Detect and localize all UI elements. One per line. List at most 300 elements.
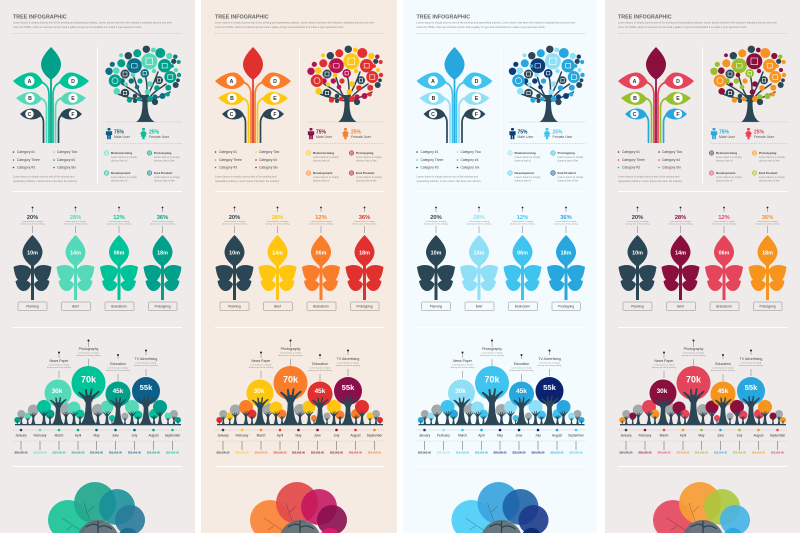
leaf plant chart: Brief bbox=[677, 304, 684, 308]
feature list bbox=[306, 151, 383, 182]
bubble forest chart: Lorem Ipsum is simply bbox=[683, 352, 705, 354]
female user stat: 25% bbox=[754, 130, 765, 136]
leaf tree diagram: D bbox=[71, 79, 75, 85]
feature list: dummy text of the bbox=[356, 158, 377, 162]
monthly timeline: $55,000.00 bbox=[494, 450, 507, 454]
category legend: Category #1 bbox=[420, 150, 439, 154]
feature list: dummy text of bbox=[313, 178, 330, 182]
monthly timeline: $55,000.00 bbox=[368, 450, 382, 454]
feature list: End Product bbox=[154, 171, 172, 175]
bubble forest chart: News Paper bbox=[251, 359, 271, 363]
leaf plant chart: 14m bbox=[474, 250, 485, 256]
feature list: dummy text of the bbox=[154, 158, 175, 162]
monthly timeline: $55,000.00 bbox=[147, 450, 161, 454]
leaf plant chart: dummy text of the printing bbox=[151, 222, 175, 226]
male user stat bbox=[316, 130, 333, 139]
icon: female user bbox=[543, 128, 551, 139]
monthly timeline: $55,000.00 bbox=[437, 450, 451, 454]
intro text bbox=[618, 20, 777, 29]
bubble forest chart: 30k bbox=[254, 388, 265, 395]
monthly timeline: January bbox=[419, 434, 431, 438]
monthly timeline: May bbox=[93, 434, 100, 438]
bubble forest chart: 70k bbox=[686, 374, 702, 384]
monthly timeline: May bbox=[497, 434, 503, 438]
bubble forest chart: Lorem Ipsum is simply bbox=[482, 352, 503, 354]
monthly timeline: March bbox=[660, 434, 669, 438]
leaf tree diagram bbox=[416, 47, 492, 143]
leaf tree diagram: F bbox=[676, 112, 680, 118]
category legend: Category #3 bbox=[622, 166, 640, 170]
bubble forest chart: Lorem Ipsum is simply bbox=[108, 366, 129, 370]
category legend: Category Three bbox=[219, 158, 242, 162]
leaf plant chart: Lorem Ipsum is simply bbox=[627, 220, 649, 223]
legend note: Lorem Ipsum is simply dummy text of the printing and bbox=[13, 174, 75, 178]
monthly timeline: $55,000.00 bbox=[274, 450, 287, 454]
intro text: since the 1500s, when an unknown printer took a galley of type and scrambled it to make a type specimen book. bbox=[416, 25, 546, 29]
bubble forest chart: Lorem Ipsum is simply bbox=[338, 362, 359, 364]
intro text: since the 1500s, when an unknown printer took a galley of type and scrambled it to make a type specimen book. bbox=[215, 25, 344, 29]
leaf tree diagram: C bbox=[633, 112, 637, 118]
monthly timeline: January bbox=[217, 434, 229, 438]
monthly timeline: June bbox=[516, 434, 523, 438]
monthly timeline: March bbox=[458, 434, 467, 438]
category legend: Category Six bbox=[662, 166, 681, 170]
bubble forest chart: 45k bbox=[516, 388, 527, 395]
feature list bbox=[508, 151, 584, 182]
female user stat bbox=[754, 130, 775, 139]
bubble forest chart: Education bbox=[514, 362, 529, 366]
feature list: Lorem Ipsum is simply bbox=[313, 175, 340, 179]
female user stat bbox=[552, 130, 573, 139]
leaf plant chart: Prototyping bbox=[759, 304, 776, 308]
monthly timeline: August bbox=[754, 434, 764, 438]
bubble forest chart: 30k bbox=[455, 388, 466, 395]
leaf plant chart: Prototyping bbox=[356, 304, 373, 308]
bubble forest chart: Photography bbox=[482, 347, 502, 351]
category legend: Category #3 bbox=[420, 166, 439, 170]
leaf plant chart: 10m bbox=[229, 250, 240, 256]
monthly timeline: $55,000.00 bbox=[570, 450, 583, 454]
category legend: Category Two bbox=[460, 150, 481, 154]
monthly timeline: April bbox=[75, 434, 81, 438]
male user stat: Male User bbox=[518, 135, 534, 139]
overlapping canopy tree bbox=[653, 482, 750, 533]
monthly timeline: $55,000.00 bbox=[695, 450, 709, 454]
leaf plant chart: 06m bbox=[316, 250, 327, 256]
feature list: Lorem Ipsum is simply bbox=[111, 175, 138, 179]
monthly timeline: May bbox=[698, 434, 705, 438]
bubble forest chart: Lorem Ipsum is simply bbox=[539, 362, 561, 364]
leaf tree diagram: A bbox=[431, 79, 435, 85]
monthly timeline: April bbox=[680, 434, 686, 438]
monthly timeline: $55,000.00 bbox=[733, 450, 747, 454]
female user stat: Female User bbox=[754, 135, 775, 139]
category legend: Category Two bbox=[259, 150, 279, 154]
feature list: dummy text of bbox=[716, 178, 733, 182]
legend note: Lorem Ipsum is simply dummy text of the printing and bbox=[416, 174, 478, 178]
bubble forest chart: 55k bbox=[342, 383, 355, 392]
leaf plant chart: Lorem Ipsum is simply bbox=[354, 220, 376, 223]
feature list: End Product bbox=[558, 171, 576, 175]
feature list: Lorem Ipsum is simply bbox=[558, 175, 584, 179]
leaf plant chart: Lorem Ipsum is simply bbox=[224, 220, 246, 223]
leaf plant chart: 36% bbox=[359, 215, 370, 221]
bubble forest chart: dummy text of the printing bbox=[538, 364, 562, 367]
bubble forest chart: dummy text of the printing bbox=[652, 366, 677, 369]
monthly timeline: $55,000.00 bbox=[53, 450, 66, 454]
leaf plant chart: 10m bbox=[27, 250, 38, 256]
bubble forest chart: Lorem Ipsum is simply bbox=[741, 362, 762, 364]
leaf plant chart: dummy text of the printing bbox=[669, 222, 693, 226]
legend note: Lorem Ipsum is simply dummy text of the printing and bbox=[215, 174, 277, 178]
monthly timeline: September bbox=[568, 434, 585, 438]
leaf plant chart bbox=[14, 207, 182, 311]
leaf plant chart: Lorem Ipsum is simply bbox=[714, 220, 735, 223]
monthly timeline: $55,000.00 bbox=[109, 450, 123, 454]
bubble forest chart bbox=[216, 340, 383, 425]
monthly timeline: February bbox=[34, 434, 47, 438]
legend note bbox=[416, 174, 481, 183]
monthly timeline: $55,000.00 bbox=[639, 450, 652, 454]
leaf plant chart bbox=[618, 207, 786, 311]
bubble forest chart: TV Advertising bbox=[337, 357, 359, 361]
monthly timeline: March bbox=[55, 434, 64, 438]
category legend: Category #4 bbox=[57, 158, 75, 162]
category legend: Category Three bbox=[622, 158, 645, 162]
icon: male user bbox=[308, 128, 314, 139]
bubble forest chart: News Paper bbox=[49, 359, 69, 363]
bubble forest chart: dummy text of the printing bbox=[249, 366, 274, 369]
bubble forest chart: Photography bbox=[684, 347, 704, 351]
leaf plant chart: Lorem Ipsum is simply bbox=[267, 220, 289, 223]
leaf plant chart: 36% bbox=[157, 215, 168, 221]
feature list: Lorem Ipsum is simply bbox=[716, 175, 743, 179]
monthly timeline bbox=[416, 429, 586, 454]
bubble forest chart: Lorem Ipsum is simply bbox=[49, 364, 70, 366]
feature list: Lorem Ipsum is simply bbox=[111, 155, 138, 159]
leaf plant chart: Planning bbox=[430, 304, 442, 308]
feature list: Prototyping bbox=[759, 151, 776, 155]
male user stat bbox=[114, 130, 131, 139]
feature list: Development bbox=[313, 171, 332, 175]
feature list bbox=[104, 151, 181, 182]
leaf plant chart: 18m bbox=[157, 250, 168, 256]
feature list: Lorem Ipsum is simply bbox=[759, 155, 786, 159]
category legend bbox=[618, 150, 682, 170]
feature list: dummy text of bbox=[111, 178, 128, 182]
feature list: End Product bbox=[759, 171, 777, 175]
feature list: Lorem Ipsum is simply bbox=[514, 155, 541, 159]
leaf tree diagram bbox=[215, 47, 291, 143]
male user stat: Male User bbox=[719, 135, 736, 139]
leaf tree diagram: A bbox=[230, 79, 234, 85]
icon: female user bbox=[745, 128, 752, 139]
category legend: Category Six bbox=[460, 166, 480, 170]
bubble forest chart: Lorem Ipsum is simply bbox=[136, 362, 157, 364]
leaf plant chart: Planning bbox=[26, 304, 39, 308]
bubble forest chart: dummy text of the printing bbox=[510, 369, 534, 372]
bubble forest chart: dummy text of the printing bbox=[134, 364, 159, 367]
leaf plant chart: dummy text of the printing bbox=[309, 222, 334, 226]
monthly timeline: $55,000.00 bbox=[330, 450, 344, 454]
female user stat bbox=[351, 130, 372, 139]
feature list: Brainstorming bbox=[313, 151, 334, 155]
feature list: Development bbox=[716, 171, 735, 175]
legend note bbox=[618, 174, 683, 183]
heading: TREE INFOGRAPHIC bbox=[215, 14, 269, 20]
leaf plant chart: dummy text of the printing bbox=[712, 222, 737, 226]
monthly timeline: $55,000.00 bbox=[456, 450, 470, 454]
leaf plant chart: 20% bbox=[632, 215, 643, 221]
category legend: Category Six bbox=[259, 166, 278, 170]
leaf plant chart: Lorem Ipsum is simply bbox=[469, 220, 490, 223]
male user stat: 75% bbox=[316, 130, 327, 136]
leaf plant chart: Lorem Ipsum is simply bbox=[670, 220, 692, 223]
leaf plant chart: 12% bbox=[315, 215, 327, 221]
icon: female user bbox=[140, 128, 147, 139]
leaf tree diagram: C bbox=[230, 112, 234, 118]
feature list: dummy text of the bbox=[759, 158, 780, 162]
monthly timeline bbox=[618, 429, 787, 454]
leaf plant chart: dummy text of the printing bbox=[223, 222, 247, 226]
category legend: Category #1 bbox=[622, 150, 640, 154]
heading: TREE INFOGRAPHIC bbox=[416, 14, 470, 20]
leaf plant chart: 10m bbox=[632, 250, 643, 256]
intro text bbox=[13, 20, 172, 29]
monthly timeline: $55,000.00 bbox=[349, 450, 363, 454]
female user stat: Female User bbox=[149, 135, 170, 139]
leaf plant chart: 20% bbox=[27, 215, 38, 221]
monthly timeline: May bbox=[295, 434, 302, 438]
leaf tree diagram: F bbox=[475, 112, 478, 118]
category legend bbox=[13, 150, 77, 170]
category legend: Category Two bbox=[57, 150, 77, 154]
monthly timeline: $55,000.00 bbox=[292, 450, 306, 454]
monthly timeline bbox=[13, 429, 182, 454]
feature list: Lorem Ipsum is simply bbox=[313, 155, 340, 159]
feature list: Development bbox=[514, 171, 534, 175]
leaf plant chart: 12% bbox=[517, 215, 528, 221]
feature list: Development bbox=[111, 171, 130, 175]
category legend: Category #4 bbox=[662, 158, 680, 162]
icon tree bbox=[105, 46, 181, 122]
leaf plant chart: Brief bbox=[476, 304, 482, 308]
leaf plant chart: dummy text of the printing bbox=[626, 222, 650, 226]
monthly timeline: $55,000.00 bbox=[166, 450, 180, 454]
bubble forest chart: dummy text of the printing bbox=[711, 369, 736, 372]
monthly timeline: $55,000.00 bbox=[714, 450, 728, 454]
monthly timeline: $55,000.00 bbox=[677, 450, 690, 454]
leaf plant chart: 28% bbox=[272, 215, 283, 221]
leaf plant chart: dummy text of the printing bbox=[424, 222, 449, 226]
monthly timeline: July bbox=[334, 434, 340, 438]
monthly timeline: September bbox=[770, 434, 786, 438]
legend note: typesetting industry. Lorem Ipsum has been the industry bbox=[215, 179, 280, 183]
leaf plant chart: Prototyping bbox=[154, 304, 171, 308]
category legend: Category #4 bbox=[460, 158, 479, 162]
leaf plant chart: Brainstorm bbox=[515, 304, 531, 308]
leaf plant chart: 12% bbox=[113, 215, 125, 221]
intro text bbox=[215, 20, 374, 29]
bubble forest chart: TV Advertising bbox=[740, 357, 762, 361]
leaf tree diagram: B bbox=[28, 96, 32, 102]
bubble forest chart: dummy text of the printing bbox=[451, 366, 475, 369]
overlapping canopy tree bbox=[250, 482, 347, 533]
bubble forest chart bbox=[619, 340, 786, 425]
leaf plant chart: Lorem Ipsum is simply bbox=[426, 220, 447, 223]
feature list: dummy text of the bbox=[759, 178, 780, 182]
heading: TREE INFOGRAPHIC bbox=[13, 14, 67, 20]
leaf plant chart bbox=[417, 207, 585, 311]
icon: male user bbox=[509, 128, 516, 139]
bubble forest chart: dummy text of the printing bbox=[480, 354, 505, 357]
male user stat bbox=[719, 130, 736, 139]
leaf plant chart: Brainstorm bbox=[313, 304, 329, 308]
bubble forest chart: Lorem Ipsum is simply bbox=[511, 366, 533, 370]
monthly timeline: $55,000.00 bbox=[217, 450, 230, 454]
legend note bbox=[13, 174, 78, 183]
leaf plant chart: Prototyping bbox=[558, 304, 574, 308]
monthly timeline: $55,000.00 bbox=[532, 450, 545, 454]
leaf tree diagram: D bbox=[475, 79, 479, 85]
monthly timeline: June bbox=[314, 434, 321, 438]
leaf plant chart: 10m bbox=[431, 250, 442, 256]
bubble forest chart: dummy text of the printing bbox=[739, 364, 764, 367]
female user stat: 25% bbox=[552, 130, 563, 136]
leaf tree diagram: C bbox=[28, 112, 32, 118]
monthly timeline: June bbox=[112, 434, 119, 438]
legend note: typesetting industry. Lorem Ipsum has been the industry bbox=[618, 179, 683, 183]
category legend: Category Two bbox=[662, 150, 682, 154]
leaf plant chart: Brainstorm bbox=[111, 304, 127, 308]
monthly timeline: $55,000.00 bbox=[15, 450, 28, 454]
category legend: Category #3 bbox=[219, 166, 237, 170]
bubble forest chart: News Paper bbox=[654, 359, 674, 363]
intro text: Lorem Ipsum is simply dummy text of the printing and typesetting industry. Lorem Ipsum has been the industry's standard dummy text ever bbox=[618, 20, 777, 24]
leaf plant chart: 18m bbox=[561, 250, 572, 256]
leaf tree diagram: D bbox=[273, 79, 277, 85]
category legend bbox=[215, 150, 279, 170]
feature list: Prototyping bbox=[356, 151, 373, 155]
leaf plant chart: Planning bbox=[228, 304, 241, 308]
panel: teal variant bbox=[0, 0, 195, 533]
bubble forest chart: dummy text of the printing bbox=[77, 354, 101, 357]
monthly timeline: $55,000.00 bbox=[513, 450, 526, 454]
leaf plant chart: dummy text of the printing bbox=[756, 222, 780, 226]
female user stat: 25% bbox=[351, 130, 362, 136]
feature list: Lorem Ipsum is simply bbox=[716, 155, 743, 159]
bubble forest chart: Education bbox=[312, 362, 328, 366]
monthly timeline: June bbox=[717, 434, 724, 438]
leaf tree diagram: D bbox=[676, 79, 680, 85]
feature list: Prototyping bbox=[154, 151, 171, 155]
bubble forest chart: Photography bbox=[79, 347, 99, 351]
feature list: dummy text of bbox=[313, 158, 330, 162]
feature list: Lorem Ipsum is simply bbox=[356, 155, 383, 159]
monthly timeline: $55,000.00 bbox=[90, 450, 104, 454]
leaf plant chart: dummy text of the printing bbox=[64, 222, 88, 226]
monthly timeline: $55,000.00 bbox=[311, 450, 325, 454]
leaf plant chart: dummy text of the printing bbox=[353, 222, 377, 226]
leaf tree diagram bbox=[13, 47, 89, 143]
leaf plant chart: dummy text of the printing bbox=[266, 222, 290, 226]
monthly timeline: $55,000.00 bbox=[551, 450, 564, 454]
monthly timeline: $55,000.00 bbox=[475, 450, 489, 454]
leaf plant chart: Lorem Ipsum is simply bbox=[109, 220, 130, 223]
bubble forest chart: 55k bbox=[140, 383, 153, 392]
leaf tree diagram: E bbox=[273, 96, 277, 102]
feature list: Lorem Ipsum is simply bbox=[514, 175, 541, 179]
bubble forest chart: Lorem Ipsum is simply bbox=[452, 364, 474, 366]
bubble forest chart: 45k bbox=[113, 388, 124, 395]
panel: blue variant bbox=[403, 0, 597, 533]
bubble forest chart: Lorem Ipsum is simply bbox=[654, 364, 675, 366]
monthly timeline: July bbox=[535, 434, 541, 438]
monthly timeline: July bbox=[132, 434, 138, 438]
category legend: Category Six bbox=[57, 166, 76, 170]
bubble forest chart: Photography bbox=[281, 347, 301, 351]
icon tree bbox=[710, 46, 786, 122]
leaf plant chart: 18m bbox=[762, 250, 773, 256]
monthly timeline: September bbox=[367, 434, 383, 438]
panel: warm variant bbox=[201, 0, 397, 533]
legend note: Lorem Ipsum is simply dummy text of the printing and bbox=[618, 174, 680, 178]
leaf plant chart: Planning bbox=[631, 304, 644, 308]
bubble forest chart: dummy text of the printing bbox=[279, 354, 303, 357]
bubble forest chart: 55k bbox=[543, 383, 557, 392]
bubble forest chart: TV Advertising bbox=[538, 357, 561, 361]
monthly timeline: August bbox=[552, 434, 562, 438]
category legend bbox=[416, 150, 481, 170]
leaf plant chart: dummy text of the printing bbox=[21, 222, 45, 226]
leaf plant chart: Lorem Ipsum is simply bbox=[757, 220, 779, 223]
monthly timeline: $55,000.00 bbox=[752, 450, 766, 454]
feature list: dummy text of the bbox=[558, 158, 579, 162]
female user stat: 25% bbox=[149, 130, 160, 136]
category legend: Category Three bbox=[17, 158, 40, 162]
icon tree bbox=[307, 46, 383, 122]
intro text: Lorem Ipsum is simply dummy text of the printing and typesetting industry. Lorem Ipsum has been the industry's standard dummy text ever bbox=[13, 20, 172, 24]
leaf plant chart: Brief bbox=[274, 304, 281, 308]
icon tree bbox=[509, 46, 585, 122]
monthly timeline: $55,000.00 bbox=[658, 450, 671, 454]
intro text: since the 1500s, when an unknown printer took a galley of type and scrambled it to make a type specimen book. bbox=[618, 25, 747, 29]
feature list: Lorem Ipsum is simply bbox=[356, 175, 383, 179]
leaf plant chart: 14m bbox=[675, 250, 686, 256]
bubble forest chart bbox=[14, 340, 181, 425]
feature list: Prototyping bbox=[558, 151, 575, 155]
bubble forest chart: dummy text of the printing bbox=[47, 366, 72, 369]
leaf plant chart: Lorem Ipsum is simply bbox=[22, 220, 44, 223]
leaf tree diagram: B bbox=[230, 96, 234, 102]
monthly timeline: April bbox=[478, 434, 485, 438]
leaf plant chart: 28% bbox=[473, 215, 485, 221]
male user stat: Male User bbox=[316, 135, 333, 139]
leaf tree diagram: F bbox=[71, 112, 75, 118]
leaf plant chart: dummy text of the printing bbox=[554, 222, 579, 226]
feature list: Lorem Ipsum is simply bbox=[154, 175, 181, 179]
monthly timeline: September bbox=[165, 434, 181, 438]
leaf plant chart: 28% bbox=[675, 215, 686, 221]
monthly timeline: February bbox=[639, 434, 652, 438]
monthly timeline: $55,000.00 bbox=[620, 450, 633, 454]
overlapping canopy tree bbox=[452, 482, 548, 533]
leaf plant chart: Lorem Ipsum is simply bbox=[556, 220, 577, 223]
bubble forest chart: dummy text of the printing bbox=[106, 369, 131, 372]
leaf tree diagram: E bbox=[676, 96, 680, 102]
leaf plant chart: Lorem Ipsum is simply bbox=[152, 220, 174, 223]
male user stat: 75% bbox=[719, 130, 730, 136]
